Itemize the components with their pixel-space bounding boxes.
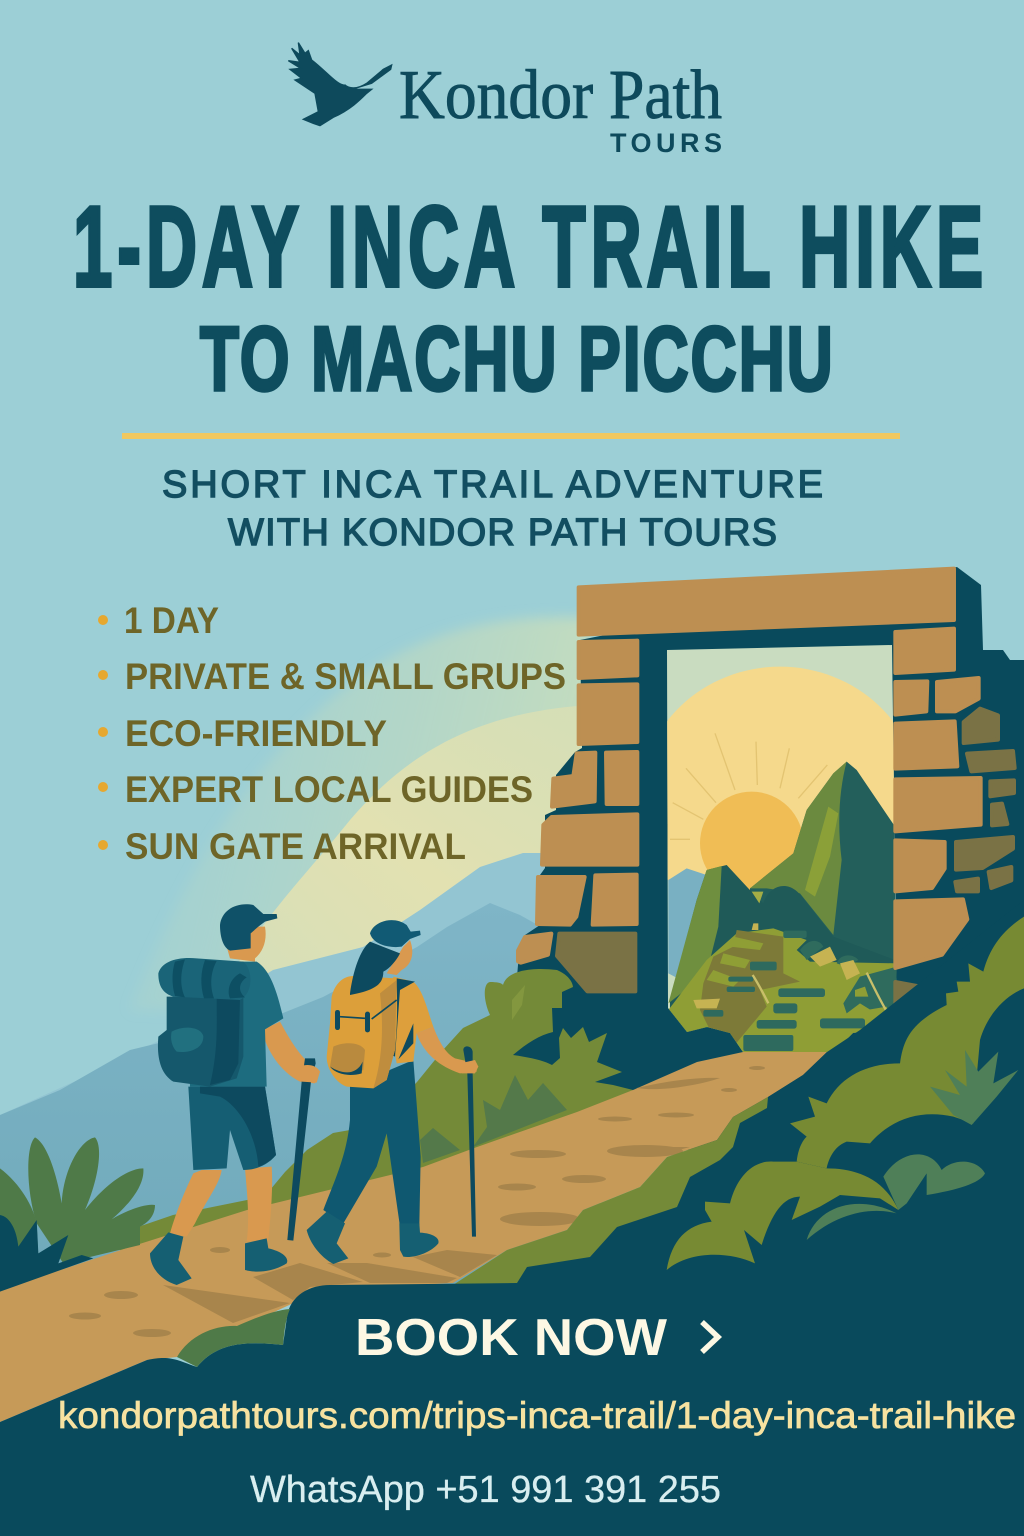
gate stones [518, 569, 1015, 1011]
bullet list: PRIVATE & SMALL GRUPS [125, 656, 566, 697]
hiker: woman [307, 920, 478, 1264]
bullet list [98, 600, 566, 867]
olive hillside and bush at gate base [100, 969, 633, 1290]
tan stones [518, 629, 981, 968]
stone gate with view [510, 567, 1024, 1150]
left plants [0, 1137, 155, 1292]
whatsapp contact: WhatsApp +51 991 391 255 [250, 1469, 721, 1511]
bullet list: ECO-FRIENDLY [125, 713, 387, 754]
title: 1-DAY INCA TRAIL HIKE [73, 184, 983, 311]
logo subline: TOURS [610, 128, 722, 158]
title: TO MACHU PICCHU [200, 308, 833, 410]
icon: chevron [702, 1322, 718, 1352]
trail shadows and stones [69, 1066, 765, 1337]
booking URL: kondorpathtours.com/trips-inca-trail/1-day-inca-trail-hike [58, 1395, 1016, 1436]
gate dark recess [510, 567, 1024, 1150]
subtitle [162, 464, 823, 554]
background scene: sun swoosh and mountains [0, 617, 600, 1300]
book now button: BOOK NOW [355, 1309, 668, 1367]
view through doorway [667, 645, 897, 1052]
bullet list: EXPERT LOCAL GUIDES [125, 769, 533, 810]
bottom foreground and CTA band [0, 900, 1024, 1536]
lintel [579, 569, 954, 635]
trail [0, 1052, 827, 1422]
small green bush left of band [177, 1309, 290, 1367]
logo wordmark: Kondor Path [399, 57, 722, 134]
hiker: man [150, 904, 320, 1285]
right foliage [667, 917, 1024, 1270]
icon: condor [288, 43, 392, 126]
subtitle: SHORT INCA TRAIL ADVENTURE [162, 464, 823, 506]
bullet list: 1 DAY [124, 600, 219, 641]
logo: Kondor Path Tours [288, 43, 722, 158]
bullet list: SUN GATE ARRIVAL [125, 826, 466, 867]
title [73, 184, 983, 410]
weathered stones [557, 709, 1015, 1011]
subtitle: WITH KONDOR PATH TOURS [228, 512, 777, 554]
olive strip beside trail [453, 1097, 790, 1290]
